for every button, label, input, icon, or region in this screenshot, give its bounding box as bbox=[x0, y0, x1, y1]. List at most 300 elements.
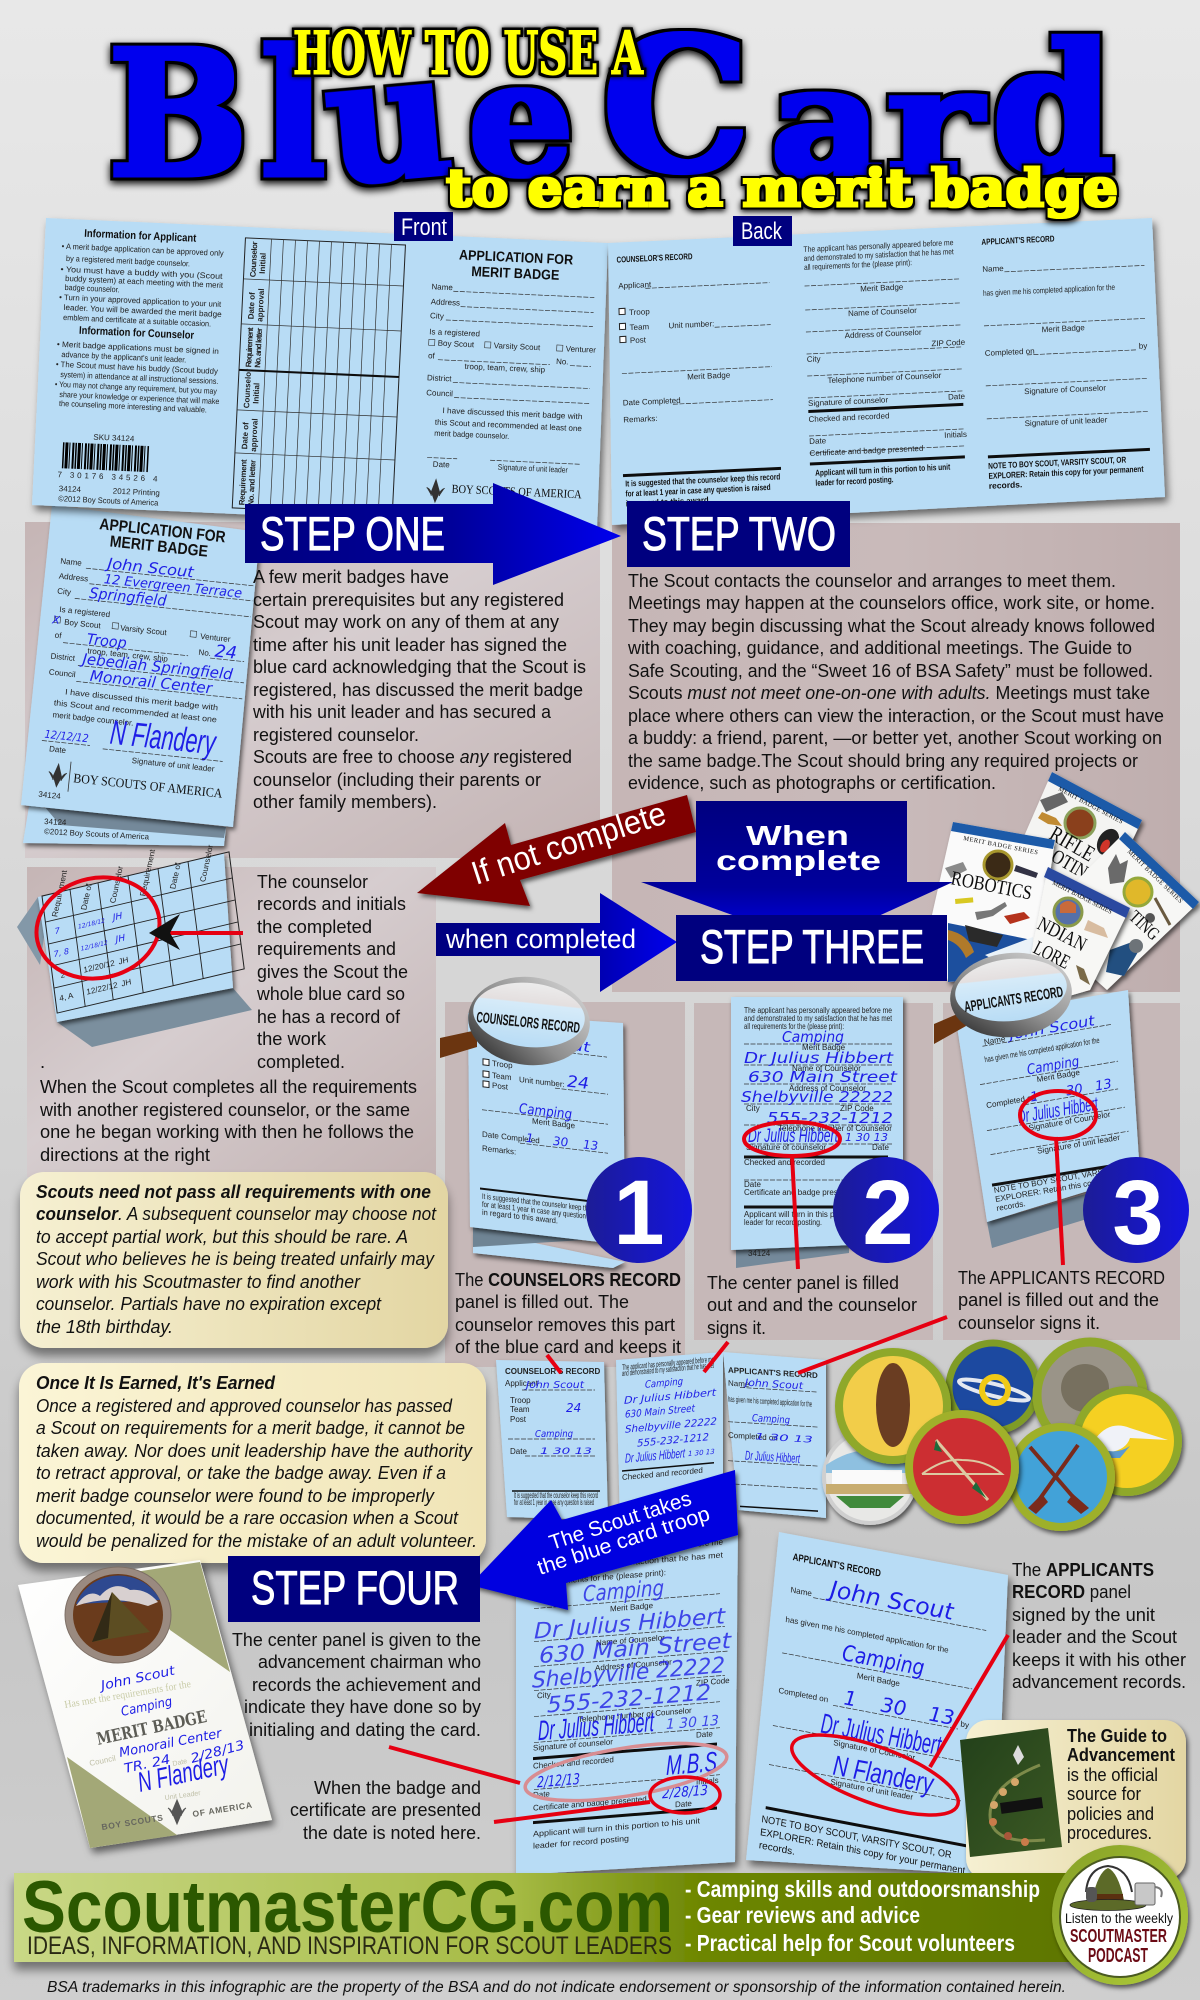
barcode: ©2012 Boy Scouts of America bbox=[58, 494, 159, 508]
information for counselor: system) in attendance at all instructional sessions. bbox=[60, 370, 219, 386]
application card, filled in: Council bbox=[48, 668, 76, 679]
panel B: 630 Main Street bbox=[625, 1403, 696, 1421]
application card, filled in: 24 bbox=[214, 642, 238, 664]
caption: center panel: signs it. bbox=[707, 1317, 766, 1338]
panel: step two background bbox=[612, 523, 1180, 992]
caption: applicants record: panel is filled out and the bbox=[958, 1289, 1159, 1310]
pointer: recorded date bbox=[389, 1747, 520, 1783]
step three card 3: applicants record: 1 bbox=[1029, 1089, 1040, 1106]
panel B: Dr Julius Hibbert bbox=[625, 1445, 686, 1466]
applicants record panel: NOTE TO BOY SCOUT, VARSITY SCOUT, OR bbox=[988, 455, 1126, 471]
center panel: Name of Counselor bbox=[848, 306, 917, 318]
step three card 1: counselors record: Post bbox=[492, 1081, 509, 1092]
arrow: the scout takes the blue card troop: The Scout takes bbox=[546, 1487, 694, 1555]
application card, filled in: Address bbox=[58, 572, 89, 584]
large applicants record card: Dr Julius Hibbert bbox=[819, 1708, 943, 1762]
caption: center panel: out and and the counselor bbox=[707, 1294, 917, 1315]
arrow: red pointer bbox=[149, 914, 243, 950]
card with counselor initials: Date of bbox=[168, 862, 183, 890]
step three card 3: applicants record: Completed on bbox=[986, 1093, 1037, 1110]
information for counselor: • The Scout must have his buddy (Scout buddy bbox=[56, 360, 218, 376]
patch: town bbox=[824, 1431, 916, 1523]
large applicants record card: Name bbox=[790, 1585, 813, 1598]
large center panel card: ZIP Code bbox=[696, 1676, 730, 1688]
text: step two: with coaching, guidance, and additional meetings. The Guide to bbox=[627, 637, 1132, 658]
magnifier: counselors record: COUNSELORS RECORD bbox=[476, 1009, 581, 1037]
requirements table: approval bbox=[255, 288, 266, 322]
large center panel card: Checked and recorded bbox=[533, 1755, 614, 1771]
application card, filled in: this Scout and recommended at least one bbox=[53, 698, 218, 724]
application form: Signature of unit leader bbox=[498, 463, 568, 475]
applicants record panel: APPLICANT'S RECORD bbox=[981, 233, 1055, 247]
step three card 2: center panel: Merit Badge bbox=[802, 1043, 846, 1052]
card with counselor initials: Date of bbox=[79, 883, 94, 911]
large center panel card: 1 30 13 bbox=[666, 1713, 719, 1733]
label: Back: Back bbox=[741, 218, 783, 245]
small open blue card bbox=[496, 1352, 826, 1528]
large center panel card: leader for record posting bbox=[533, 1834, 629, 1851]
text: step two: Scouts must not meet one-on-one with adults. Meetings must take bbox=[628, 682, 1150, 703]
counselors record panel: Remarks: bbox=[623, 414, 658, 425]
panel B: and demonstrated to my satisfaction that he has met bbox=[622, 1361, 714, 1378]
card with counselor initials: JH bbox=[121, 977, 132, 988]
large applicants record card: Signature of Counselor bbox=[833, 1738, 916, 1763]
step three card 2: center panel: 555-232-1212 bbox=[767, 1109, 893, 1127]
large center panel card: Date bbox=[533, 1789, 550, 1800]
text: date noted: certificate are presented bbox=[290, 1799, 481, 1820]
patch: yellow and white bbox=[1076, 1390, 1178, 1492]
requirements table: Requirement bbox=[237, 459, 249, 506]
blue card back bbox=[608, 218, 1165, 525]
step three card 1: counselors record: Merit Badge bbox=[532, 1117, 576, 1130]
large applicants record card: has given me his completed application for the bbox=[785, 1615, 949, 1655]
text: step two: the same badge.The Scout should bring any required projects or bbox=[628, 750, 1138, 771]
application card, filled in: Venturer bbox=[200, 632, 231, 644]
counselors record panel: Applicant bbox=[618, 280, 652, 291]
text: applicants record: signed by the unit bbox=[1012, 1604, 1155, 1625]
information for counselor bbox=[54, 324, 223, 415]
title: Blue Card letters: C bbox=[602, 0, 750, 214]
large applicants record card bbox=[746, 1532, 1008, 1890]
barcode: 7 30176 34526 4 bbox=[57, 470, 158, 484]
text: counselor records: completed. bbox=[257, 1051, 345, 1072]
text: step four: records the achievement and bbox=[252, 1674, 481, 1695]
counselors record panel: COUNSELOR'S RECORD bbox=[616, 251, 693, 265]
panel B: Dr Julius Hibbert bbox=[624, 1387, 717, 1407]
text: applicants record: advancement records. bbox=[1012, 1671, 1186, 1692]
callout: guide to advancement: procedures. bbox=[1067, 1822, 1152, 1843]
text: step four: The center panel is given to the bbox=[232, 1629, 481, 1650]
red pointer lines to small card bbox=[547, 1317, 947, 1373]
title: Blue Card letters: d bbox=[992, 5, 1114, 212]
step three card 1: counselors record: Team bbox=[492, 1071, 512, 1082]
application form: of bbox=[428, 351, 436, 361]
application form: Council bbox=[426, 388, 453, 398]
applicants record panel: Merit Badge bbox=[1042, 323, 1085, 334]
card with counselor initials: 2 bbox=[60, 970, 66, 980]
certificate badge bbox=[65, 1567, 171, 1663]
large applicants record card: Signature of unit leader bbox=[830, 1777, 914, 1802]
center panel: leader for record posting. bbox=[815, 474, 894, 488]
counselors record panel: for at least 1 year in case any question is raised bbox=[625, 482, 771, 499]
panel B: Camping bbox=[645, 1377, 683, 1391]
panel B bbox=[616, 1352, 723, 1528]
counselors record panel: in regard to this award. bbox=[626, 495, 711, 509]
step three card 2: center panel: Dr Julius Hibbert bbox=[748, 1126, 838, 1147]
text: step four: indicate they have done so by bbox=[244, 1696, 482, 1717]
callout: partials: to accept partial work, but this should be rare. A bbox=[36, 1226, 408, 1247]
panel: step three part 2 background bbox=[694, 1003, 933, 1340]
text: step two: place where others can view the interaction, or the Scout must have bbox=[628, 705, 1164, 726]
panel A: COUNSELOR'S RECORD bbox=[505, 1367, 600, 1376]
merit badge certificate: Council bbox=[89, 1754, 117, 1768]
step three card 3: applicants record bbox=[956, 990, 1150, 1265]
requirements table: No. and letter bbox=[253, 328, 264, 368]
blue card front bbox=[32, 218, 608, 530]
text: step four: advancement chairman who bbox=[258, 1651, 481, 1672]
text: counselor records: records and initials bbox=[257, 893, 406, 914]
panel A: Troop bbox=[510, 1396, 531, 1405]
red ellipse highlight bbox=[27, 866, 169, 990]
caption: counselors record: panel is filled out. The bbox=[455, 1291, 629, 1312]
number badge 3: 3 bbox=[1112, 1162, 1164, 1264]
ellipse: checked and recorded bbox=[522, 1732, 730, 1812]
large center panel card: 2/28/13 bbox=[662, 1783, 708, 1802]
center panel: ZIP Code bbox=[931, 338, 966, 348]
card with counselor initials: JH bbox=[118, 955, 129, 966]
caption: applicants record bbox=[958, 1267, 1165, 1333]
information for applicant: • A merit badge application can be approved only bbox=[61, 242, 224, 258]
requirements table bbox=[232, 238, 405, 515]
text: step one: counselor (including their parents or bbox=[253, 769, 541, 790]
callout: guide to advancement: Advancement bbox=[1067, 1744, 1175, 1765]
step three card 3: applicants record: has given me his completed application for the bbox=[984, 1036, 1101, 1064]
caption: center panel: The center panel is filled bbox=[707, 1272, 899, 1293]
text: counselor records: the work bbox=[257, 1028, 327, 1049]
panel B: 1 30 13 bbox=[688, 1447, 715, 1458]
large applicants record card: records. bbox=[758, 1840, 796, 1858]
book: indian lore: MERIT BADGE SERIES bbox=[1051, 880, 1113, 916]
application card, filled in: Date bbox=[49, 744, 67, 755]
large applicants record card: by bbox=[960, 1720, 970, 1730]
panel A: for at least 1 year in case any question is raised bbox=[514, 1498, 594, 1507]
barcode: 34124 bbox=[59, 484, 82, 494]
step three card 2: center panel: Signature of counselor bbox=[746, 1143, 826, 1152]
red highlight signature bbox=[1020, 1091, 1096, 1139]
heading: step two: STEP TWO bbox=[642, 507, 836, 560]
text: step one: registered, has discussed the merit badge bbox=[253, 679, 583, 700]
text: step one: Scouts are free to choose any registered bbox=[253, 746, 572, 767]
large applicants record card: Completed on bbox=[778, 1686, 829, 1704]
callout: guide to advancement: is the official bbox=[1067, 1764, 1158, 1785]
application form: Name bbox=[431, 282, 454, 292]
large applicants record card: 13 bbox=[928, 1702, 956, 1730]
callout: once earned: would be penalized for the mistake of an adult volunteer. bbox=[36, 1530, 477, 1551]
center panel: Date bbox=[948, 392, 966, 402]
step three card 2: center panel: 1 30 13 bbox=[845, 1131, 888, 1144]
ellipse: unit leader signature bbox=[783, 1719, 967, 1831]
step three card 1: counselors record: 30 bbox=[553, 1134, 569, 1150]
merit badge books bbox=[932, 772, 1199, 1010]
merit badge certificate: BOY SCOUTS bbox=[101, 1812, 164, 1832]
text: step two: a buddy: a friend, parent, —or better yet, another Scout working on bbox=[628, 727, 1162, 748]
callout: once earned: documented, it would be a rare occasion when a Scout bbox=[36, 1507, 459, 1528]
heading: step four bbox=[228, 1556, 480, 1622]
step three card 3: applicants record: records. bbox=[996, 1199, 1026, 1213]
large center panel card: my satisfaction that he has met bbox=[600, 1550, 724, 1569]
patch: canoe bbox=[839, 1352, 947, 1460]
application card, filled in: John Scout bbox=[103, 554, 196, 582]
requirements table: Counselor bbox=[249, 241, 259, 278]
red line to caption bbox=[792, 1155, 798, 1269]
card with counselor initials: 7, 8 bbox=[53, 946, 70, 959]
application card, filled in: Troop bbox=[86, 630, 128, 652]
application card, filled in: merit badge counselor. bbox=[52, 710, 134, 728]
requirements table: Date of bbox=[240, 422, 250, 450]
text: counselor records: one he began working with then he follows the bbox=[40, 1121, 414, 1142]
center panel: Merit Badge bbox=[860, 282, 904, 293]
number badge 1: 1 bbox=[613, 1162, 665, 1264]
step three card 2: center panel: Certificate and badge presented bbox=[744, 1188, 858, 1197]
step three card 2: center panel: leader for record posting. bbox=[744, 1218, 822, 1227]
application card, filled in: Is a registered bbox=[59, 605, 111, 619]
heading: step four: STEP FOUR bbox=[251, 1561, 459, 1614]
information for applicant: • You must have a buddy with you (Scout bbox=[60, 265, 224, 281]
panel A: Camping bbox=[535, 1429, 573, 1440]
application form: troop, team, crew, ship bbox=[464, 362, 546, 375]
application form: Venturer bbox=[566, 344, 596, 355]
panel A: Applicant bbox=[505, 1379, 539, 1388]
center panel: Initials bbox=[944, 430, 967, 440]
information for counselor: • You may not change any requirement, but you may bbox=[55, 380, 217, 396]
center panel: The applicant has personally appeared before me bbox=[803, 238, 954, 254]
panel C: John Scout bbox=[743, 1378, 804, 1392]
information for applicant: badge counselor. bbox=[64, 283, 120, 294]
application card, filled in: City bbox=[57, 587, 72, 597]
text: step one: Scout may work on any of them at any bbox=[253, 611, 560, 632]
panel C bbox=[723, 1352, 826, 1518]
card with counselor initials: 12/18/12 bbox=[78, 917, 105, 931]
step three card 2: center panel: 34124 bbox=[748, 1249, 771, 1258]
large applicants record card: John Scout bbox=[825, 1575, 956, 1626]
arrow: step one heading: STEP ONE bbox=[260, 507, 445, 560]
callout: once earned: a Scout on requirements for a merit badge, it cannot be bbox=[36, 1417, 465, 1438]
book: hunting bbox=[1040, 832, 1199, 990]
application card, filled in: BOY SCOUTS OF AMERICA bbox=[73, 770, 224, 801]
patch: gray bbox=[1037, 1342, 1143, 1448]
application card, filled in: No. bbox=[198, 648, 211, 658]
application form bbox=[421, 245, 601, 509]
panel: step one background bbox=[25, 522, 600, 858]
step three card 2: center panel: Dr Julius Hibbert bbox=[744, 1049, 894, 1067]
text: counselor records: When the Scout completes all the requirements bbox=[40, 1076, 417, 1097]
title: Blue Card letters: u bbox=[317, 14, 459, 224]
footer bullets: - Practical help for Scout volunteers bbox=[685, 1930, 1015, 1956]
counselors record panel bbox=[616, 247, 782, 509]
application form: City bbox=[430, 311, 444, 321]
title: how to use a: HOW TO USE A bbox=[293, 19, 644, 89]
callout: partials: counselor. A subsequent counselor may choose not bbox=[36, 1203, 437, 1224]
large center panel card: M.B.S bbox=[666, 1746, 717, 1781]
callout: partials: counselor. Partials have no expiration except bbox=[36, 1293, 382, 1314]
arrow: when complete: complete bbox=[716, 845, 881, 876]
logo: ScoutmasterCG.com: ScoutmasterCG.com bbox=[22, 1867, 673, 1948]
requirements table: No. and letter bbox=[246, 460, 258, 506]
callout: guide to advancement: policies and bbox=[1067, 1803, 1154, 1824]
text: counselor records: The counselor bbox=[257, 871, 368, 892]
callout: partials: Scouts need not pass all requirements with one bbox=[36, 1181, 431, 1202]
arrow: when complete bbox=[641, 801, 953, 945]
panel A: 1 30 13 bbox=[540, 1447, 592, 1457]
panel B: Checked and recorded bbox=[622, 1466, 703, 1482]
book: rifle shooting: MERIT BADGE SERIES bbox=[1057, 786, 1124, 826]
large applicants record card: NOTE TO BOY SCOUT, VARSITY SCOUT, OR bbox=[761, 1814, 952, 1861]
information for counselor: • Merit badge applications must be signed in bbox=[57, 340, 219, 356]
book: rifle shooting bbox=[1005, 772, 1142, 930]
large center panel card: Signature of counselor bbox=[533, 1737, 613, 1753]
text: step two bbox=[627, 570, 1164, 793]
book: indian lore bbox=[1020, 867, 1130, 1010]
merit badge certificate: OF AMERICA bbox=[192, 1800, 253, 1819]
large center panel card: Telephone number of Counselor bbox=[578, 1706, 692, 1724]
number badge 3 bbox=[1083, 1157, 1189, 1264]
text: step one: time after his unit leader has signed the bbox=[253, 634, 567, 655]
book: robotics: ROBOTICS bbox=[949, 867, 1034, 905]
text: step one: other family members). bbox=[253, 791, 437, 812]
step three card 2: center panel: Checked and recorded bbox=[744, 1158, 825, 1167]
large center panel card: Certificate and badge presented bbox=[533, 1795, 647, 1813]
large center panel card: ments for the (please print): bbox=[566, 1568, 666, 1585]
application card, filled in: Jebediah Springfield bbox=[79, 650, 234, 684]
text: counselor records: gives the Scout the bbox=[257, 961, 408, 982]
information for applicant: • Turn in your approved application to your unit bbox=[59, 293, 222, 309]
panel C: Completed on bbox=[728, 1431, 778, 1443]
callout: once earned: taken away. Nor does unit leadership have the authority bbox=[36, 1440, 474, 1461]
panel A: Date bbox=[510, 1447, 527, 1456]
applicants record panel: by bbox=[1139, 341, 1147, 351]
large center panel card: 2/12/13 bbox=[537, 1770, 580, 1791]
step three card 1: counselors record: John Scout bbox=[493, 1029, 591, 1056]
large center panel card: Camping bbox=[583, 1576, 664, 1608]
book: indian lore: NDIAN bbox=[1034, 913, 1090, 956]
panel C: Camping bbox=[752, 1413, 790, 1426]
requirements table: approval bbox=[249, 418, 260, 452]
application form: BOY SCOUTS OF AMERICA bbox=[451, 482, 582, 501]
panel A: Post bbox=[510, 1415, 527, 1424]
step three card 3: applicants record: 13 bbox=[1094, 1077, 1113, 1095]
callout: guide to advancement bbox=[960, 1720, 1186, 1880]
label: Front: Front bbox=[401, 214, 447, 241]
application card, filled in: Signature of unit leader bbox=[131, 756, 215, 774]
merit badge certificate: Has met the requirements for the bbox=[64, 1679, 192, 1711]
step three card 2: center panel: Camping bbox=[782, 1028, 844, 1046]
card with counselor initials: Requirement bbox=[138, 848, 157, 897]
text: step two: They may begin discussing what the Scout already knows followed bbox=[628, 615, 1155, 636]
step three card 2: center panel: 630 Main Street bbox=[748, 1068, 898, 1086]
large center panel card: Applicant will turn in this portion to his unit bbox=[533, 1816, 701, 1839]
text: step one: A few merit badges have bbox=[253, 566, 449, 587]
counselors record panel: Unit number: bbox=[668, 319, 714, 330]
applicants record panel: EXPLORER: Retain this copy for your permanent bbox=[988, 464, 1144, 481]
counselors record panel: Merit Badge bbox=[687, 371, 731, 382]
magnifier: applicants record bbox=[934, 947, 1076, 1044]
step three card 1: counselors record: Remarks: bbox=[482, 1144, 516, 1157]
application card, filled in: N Flandery bbox=[108, 714, 219, 763]
requirements table: Counselor bbox=[242, 369, 253, 409]
barcode: 2012 Printing bbox=[113, 487, 160, 498]
caption: center panel bbox=[707, 1272, 917, 1338]
arrow: when complete: When bbox=[746, 820, 849, 851]
merit badge certificate: Date bbox=[172, 1758, 188, 1768]
text: counselor records: directions at the right bbox=[40, 1144, 210, 1165]
number badge 1 bbox=[586, 1157, 692, 1264]
callout: once earned: to retract approval, or take the badge away. Even if a bbox=[36, 1462, 446, 1483]
step three card 2: center panel: Applicant will turn in this portion bbox=[744, 1210, 854, 1219]
panel C: 1 30 13 bbox=[755, 1432, 813, 1446]
step three card 3: applicants record: John Scout bbox=[1005, 1013, 1096, 1044]
caption: counselors record: The COUNSELORS RECORD bbox=[455, 1269, 681, 1290]
card with counselor initials: JH bbox=[113, 932, 126, 946]
large center panel card: Name of Counselor bbox=[596, 1633, 665, 1648]
pointer: presented date bbox=[494, 1802, 650, 1822]
callout: partials bbox=[20, 1172, 448, 1348]
panel C: has given me his completed application for the bbox=[728, 1395, 812, 1409]
card with counselor initials: Counselor bbox=[108, 865, 125, 904]
text: date noted bbox=[290, 1777, 481, 1843]
book: robotics: MERIT BADGE SERIES bbox=[963, 835, 1039, 857]
text: step one: certain prerequisites but any registered bbox=[253, 589, 564, 610]
ellipse: date presented bbox=[650, 1777, 720, 1813]
title bbox=[108, 0, 1118, 224]
arrow: the scout takes the blue card troop bbox=[470, 1470, 738, 1610]
merit badge certificate: 2/28/13 bbox=[189, 1738, 246, 1767]
application form: Varsity Scout bbox=[494, 341, 541, 352]
counselors record panel: It is suggested that the counselor keep this record bbox=[625, 471, 780, 489]
step three card 2: center panel: and demonstrated to my satisfaction that he has met bbox=[744, 1014, 893, 1023]
application card, filled in: 12 Evergreen Terrace bbox=[103, 572, 243, 602]
panel: counselor records background bbox=[27, 867, 436, 1177]
requirements table: Initial bbox=[251, 383, 261, 404]
card with counselor initials: Counselor bbox=[198, 844, 215, 883]
applicants record panel bbox=[981, 229, 1151, 491]
callout: once earned bbox=[19, 1363, 486, 1563]
application card, filled in: 34124 bbox=[38, 790, 62, 801]
step three card 3: applicants record: NOTE TO BOY SCOUT, VARSITY SCOUT, bbox=[993, 1160, 1147, 1195]
arrow: if not complete: If not complete bbox=[467, 794, 670, 892]
card with counselor initials: 7 bbox=[54, 925, 61, 936]
step three card 1: counselors record: Troop bbox=[492, 1059, 513, 1070]
panel B: 555-232-1212 bbox=[637, 1432, 709, 1450]
text: step two: Meetings may happen at the counselors office, work site, or home. bbox=[628, 592, 1155, 613]
text: step two: Safe Scouting, and the “Sweet 16 of BSA Safety” must be followed. bbox=[628, 660, 1153, 681]
title: Blue Card letters: r bbox=[886, 38, 985, 206]
magnifier: counselors record bbox=[440, 971, 594, 1071]
podcast badge: PODCAST bbox=[1088, 1945, 1148, 1967]
large applicants record card: Camping bbox=[841, 1640, 926, 1682]
step three card 3: applicants record: Signature of Counselor bbox=[1028, 1110, 1111, 1133]
podcast badge: Listen to the weekly bbox=[1065, 1910, 1173, 1926]
callout: guide to advancement: source for bbox=[1067, 1783, 1141, 1804]
application card, filled in: ©2012 Boy Scouts of America bbox=[44, 827, 150, 842]
center panel: City bbox=[807, 354, 821, 364]
text: step one: blue card acknowledging that the Scout is bbox=[253, 656, 586, 677]
application form: Address bbox=[431, 297, 460, 308]
title: Blue Card letters: B bbox=[108, 13, 248, 217]
book: rifle shooting: RIFLE bbox=[1046, 821, 1100, 866]
large applicants record card: EXPLORER: Retain this copy for your permanent bbox=[760, 1827, 966, 1877]
large applicants record card: 1 bbox=[843, 1685, 858, 1712]
heading: step three: STEP THREE bbox=[700, 920, 924, 973]
